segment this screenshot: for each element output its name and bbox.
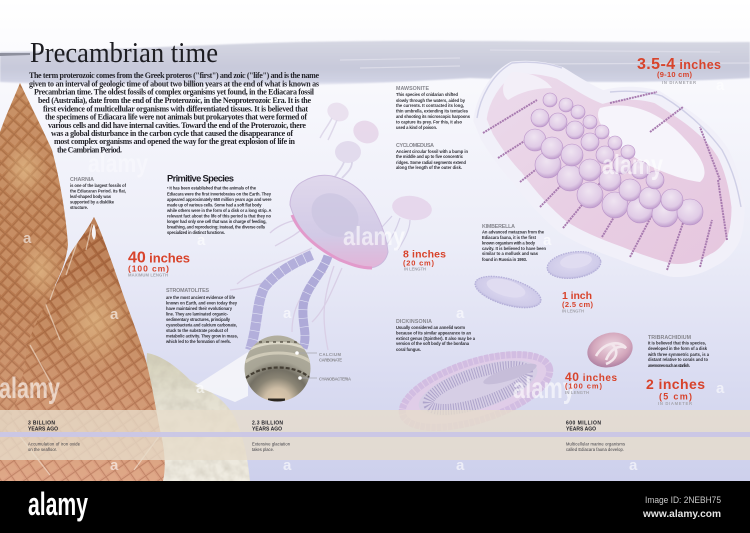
illustration: tribrachidium — [583, 328, 637, 372]
text block: stromatolites: sedimentary structures, principally — [166, 317, 231, 322]
timeline entry: 600 million years: YEARS AGO — [566, 426, 596, 432]
text block: tribrachidium: with three symmetric parts, is a — [647, 352, 710, 357]
watermarks — [0, 77, 725, 474]
text block: primitive species: while others were in the form of a disk or a long strip. A — [166, 208, 272, 213]
intro paragraph — [29, 71, 319, 154]
measure: jellyfish 8 inches: (20 cm) — [403, 258, 434, 268]
text block: charnia: leaf-shaped body was — [70, 194, 112, 199]
watermarks: a — [629, 457, 638, 474]
text block: primitive species: Primitive Species — [167, 172, 234, 184]
text block: primitive species: longer had only one cell that was in charge of feeding, — [167, 219, 266, 224]
charnia back frond — [0, 83, 68, 440]
text block: tribrachidium: TRIBRACHIDIUM — [648, 335, 692, 341]
text block: stromatolites: STROMATOLITES — [166, 288, 209, 294]
watermarks: a — [197, 232, 206, 249]
callout dots — [295, 351, 299, 355]
measure: tribrachidium 2 inches: 2 inches — [646, 376, 705, 392]
mawsonite body — [480, 67, 738, 271]
measure: kimberella 1 inch: (2.5 cm) — [562, 300, 594, 309]
measure: charnia 40 inches: MAXIMUM LENGTH — [128, 272, 168, 278]
measure: tribrachidium 2 inches: (5 cm) — [659, 392, 692, 402]
illustration: small background jellyfish — [320, 99, 433, 250]
text block: charnia — [70, 177, 127, 210]
light cone toward stromatolite — [195, 352, 248, 402]
watermarks: a — [716, 77, 725, 94]
measure: dickinsonia 40 inches: (100 cm) — [565, 382, 602, 390]
text block: cyclomedusa — [396, 143, 468, 170]
watermarks: a — [110, 457, 119, 474]
text block: stromatolites: which led to the formation of reefs. — [165, 339, 231, 344]
stromatolite labels: CARBONATE — [319, 358, 342, 362]
intro paragraph: the specimens of Ediacara life were not animals but prokaryotes that were formed of — [45, 113, 307, 122]
stromatolite labels — [319, 352, 351, 382]
watermarks: alamy — [0, 372, 60, 405]
illustration: kimberella large — [472, 270, 544, 314]
text block: primitive species — [166, 172, 272, 235]
text block: charnia: structure. — [70, 205, 88, 210]
timeline entry: 600 million years — [566, 420, 625, 452]
text block: cyclomedusa: along the length of the outer disk. — [396, 165, 462, 170]
text block: primitive species: specialized in distinct functions. — [167, 230, 225, 235]
text block: mawsonite — [396, 86, 471, 130]
text block: mawsonite: the currents. It contracted its long, — [396, 103, 464, 108]
text block: primitive species: Ediacara were the first invertebrates on the Earth. They — [167, 192, 272, 197]
text block: tribrachidium: developed in the form of a disk — [648, 346, 708, 351]
text block: mawsonite: This species of cnidarian shifted — [396, 92, 458, 97]
watermarks: a — [543, 232, 552, 249]
intro paragraph: was a global disturbance in the carbon cycle that caused the disappearance of — [51, 129, 293, 138]
limestone rock — [140, 353, 250, 481]
watermarks: a — [456, 305, 465, 322]
timeline entry: 2.3 billion years: 2.3 BILLION — [252, 420, 283, 426]
timeline lilac stripe — [0, 432, 750, 437]
timeline entry: 3 billion years: 3 BILLION — [28, 420, 55, 426]
timeline entry: 3 billion years: Accumulation of iron oxide — [28, 442, 81, 446]
water surface band — [0, 41, 750, 86]
mawsonite radial ribs — [483, 92, 727, 270]
text block: primitive species: relevant fact about the life of this period is that they no — [167, 214, 271, 219]
watermarks: alamy — [513, 372, 575, 405]
watermarks: a — [283, 457, 292, 474]
measure: dickinsonia 40 inches: IN LENGTH — [565, 390, 589, 395]
text block: mawsonite: to capture its prey. For this, it also — [396, 120, 462, 125]
jellyfish filaments — [230, 220, 342, 350]
intro paragraph: The term proterozoic comes from the Greek proteros ("first") and zoic ("life") and is the name — [29, 71, 319, 80]
text block: mawsonite: thin umbrella, extending its tentacles — [396, 109, 469, 114]
text block: kimberella: similar to a mollusk and was — [482, 251, 539, 256]
text block: kimberella: KIMBERELLA — [482, 224, 515, 230]
text block: stromatolites: are the most ancient evidence of life — [166, 295, 236, 300]
measure: mawsonite diameter: IN DIAMETER — [662, 80, 696, 85]
text block: kimberella: found in Russia in 1993. — [482, 257, 527, 262]
footer logo: alamy — [28, 486, 88, 522]
illustration: large jellyfish — [230, 175, 388, 350]
text block: stromatolites: known on Earth, and even today they — [166, 300, 238, 305]
timeline entry: 3 billion years: on the seafloor. — [28, 447, 57, 452]
mawsonite rim shading — [477, 62, 741, 207]
text block: dickinsonia: extinct genus (Spinther). It also may be a — [396, 336, 476, 341]
measure: mawsonite diameter: 3.5-4 inches — [637, 56, 721, 73]
text block: tribrachidium: It is believed that this species, — [648, 341, 706, 346]
measure: tribrachidium 2 inches — [646, 376, 705, 406]
timeline tan band — [0, 410, 750, 460]
text block: kimberella: cavity. It is believed to have been — [482, 246, 546, 251]
text block: cyclomedusa: CYCLOMEDUSA — [396, 143, 434, 149]
text block: mawsonite: and shooting its microscopic harpoons — [396, 114, 471, 119]
intro paragraph: bed (Australia), date from the end of the Proterozoic, in the Neoproterozoic Era. It is the — [38, 96, 311, 105]
text block: mawsonite: slowly through the waters, aided by — [396, 98, 466, 103]
timeline entry: 2.3 billion years: YEARS AGO — [252, 426, 282, 432]
text block: stromatolites: cyanobacteria and calcium carbonate, — [166, 322, 237, 327]
text block: kimberella: known organism with a body — [482, 240, 536, 245]
text block: primitive species: made up of various cells. Some had a soft flat body — [167, 203, 262, 208]
measure: mawsonite diameter: (9-10 cm) — [657, 70, 692, 79]
text block: dickinsonia: coral fungus. — [396, 347, 421, 352]
measure: kimberella 1 inch: 1 inch — [562, 290, 592, 302]
intro paragraph: various cells and did have internal cavities. Toward the end of the Proterozoic, there — [48, 121, 306, 130]
timeline entry: 2.3 billion years — [252, 420, 291, 452]
timeline entry: 2.3 billion years: Extensive glaciation — [252, 442, 291, 446]
timeline entry: 2.3 billion years: takes place. — [252, 447, 274, 452]
text block: stromatolites: stuck to the substrate product of — [166, 328, 229, 333]
stromatolite labels: CALCIUM — [319, 352, 342, 357]
measure: kimberella 1 inch — [562, 290, 594, 314]
intro paragraph: Precambrian time. The oldest fossils of complex organisms yet found, in the Ediacara fossil — [34, 87, 315, 96]
charnia front frond — [0, 215, 170, 481]
timeline entry: 3 billion years: YEARS AGO — [28, 426, 58, 432]
mawsonite pale upper patch — [503, 72, 552, 100]
watermarks: alamy — [343, 221, 405, 251]
title: Precambrian time — [30, 38, 218, 69]
text block: stromatolites — [165, 288, 238, 344]
stromatolite cross-section — [244, 336, 317, 402]
measure: charnia 40 inches: (100 cm) — [128, 264, 169, 274]
text block: charnia: is one of the largest fossils of — [70, 183, 127, 188]
text block: dickinsonia: because of its similar appearance to an — [396, 331, 471, 336]
watermarks: a — [283, 305, 292, 322]
website: www.alamy.com — [642, 508, 721, 520]
jellyfish oral arms — [250, 255, 312, 350]
text block: charnia: the Ediacaran Period. Its flat, — [70, 188, 126, 193]
measure: charnia 40 inches: 40 inches — [128, 250, 190, 266]
mawsonite scalloped core — [524, 93, 703, 227]
text block: dickinsonia: version of the soft body of the bonfana — [396, 341, 470, 346]
text block: charnia: CHARNIA — [70, 177, 94, 183]
measure: jellyfish 8 inches: IN LENGTH — [404, 267, 426, 272]
mawsonite pale opening — [598, 106, 705, 182]
measure: dickinsonia 40 inches: 40 inches — [565, 370, 617, 384]
footer bar — [0, 481, 750, 533]
watermarks: alamy — [602, 149, 663, 180]
text block: stromatolites: have maintained their evolutionary — [166, 306, 233, 311]
illustration: kimberella small — [545, 248, 603, 282]
text block: tribrachidium: anemones such as starfish. — [648, 363, 690, 368]
jellyfish bell — [290, 175, 388, 268]
measure: kimberella 1 inch: IN LENGTH — [562, 309, 584, 314]
watermarks: a — [110, 306, 119, 323]
illustration: dickinsonia — [390, 336, 562, 446]
timeline entry: 600 million years: called Ediacara fauna develop. — [566, 447, 624, 452]
stromatolite labels: CYANOBACTERIA — [319, 376, 351, 382]
intro paragraph: most complex organisms and opened the way for the great explosion of life in — [54, 137, 296, 146]
text block: kimberella — [482, 224, 546, 262]
text block: dickinsonia: DICKINSONIA — [396, 319, 432, 325]
text block: mawsonite: used a kind of poison. — [396, 125, 437, 130]
timeline entry: 3 billion years — [28, 420, 81, 452]
watermarks: a — [196, 380, 205, 397]
text block: stromatolites: line. They are laminated organic- — [166, 311, 229, 316]
measure: charnia 40 inches — [128, 250, 190, 278]
watermarks: alamy — [88, 148, 148, 178]
text block: cyclomedusa: Ancient circular fossil with a bump in — [396, 149, 468, 154]
text block: dickinsonia: Usually considered an annelid worm — [396, 325, 465, 330]
text block: stromatolites: metabolic activity. They grow in mass, — [166, 333, 238, 338]
text block: tribrachidium: distant relative to corals and to — [648, 357, 708, 362]
text block: tribrachidium — [647, 335, 710, 368]
watermarks: a — [456, 457, 465, 474]
watermarks: a — [23, 230, 32, 247]
measure: dickinsonia 40 inches — [565, 370, 617, 395]
measure: jellyfish 8 inches — [403, 248, 446, 272]
text block: primitive species: appeared approximately 650 million years ago and were — [167, 197, 272, 202]
measure: mawsonite diameter — [637, 56, 721, 85]
text block: cyclomedusa: ridges. Some radial segments extend — [396, 160, 466, 165]
image id: Image ID: 2NEBH75 — [645, 495, 721, 506]
text block: primitive species: • It has been established that the animals of the — [167, 186, 257, 191]
intro paragraph: given to an interval of geologic time of about two billion years at the end of what is known as — [29, 79, 319, 88]
intro paragraph: the Cambrian Period. — [57, 145, 122, 154]
watermarks: a — [716, 380, 725, 397]
measure: jellyfish 8 inches: 8 inches — [403, 248, 446, 260]
text block: charnia: supported by a disklike — [70, 199, 115, 204]
text block: mawsonite: MAWSONITE — [396, 86, 429, 92]
text block: primitive species: breathing, and reproducing; instead, the diverse cells — [167, 225, 266, 230]
timeline entry: 600 million years: Multicellular marine organisms — [566, 442, 625, 446]
text block: cyclomedusa: the middle and up to five concentric — [396, 154, 464, 159]
text block: dickinsonia — [396, 319, 476, 352]
illustration: mawsonite — [477, 62, 741, 271]
illustration: charnia fossils — [0, 80, 250, 481]
intro paragraph: first evidence of multicellular organisms with differentiated tissues. It is believed that — [43, 104, 308, 113]
timeline entry: 600 million years: 600 MILLION — [566, 420, 601, 426]
measure: tribrachidium 2 inches: IN DIAMETER — [658, 401, 692, 406]
text block: kimberella: Ediacara fauna, it is the first — [482, 235, 537, 240]
text block: kimberella: An advanced metazoan from the — [482, 230, 545, 235]
